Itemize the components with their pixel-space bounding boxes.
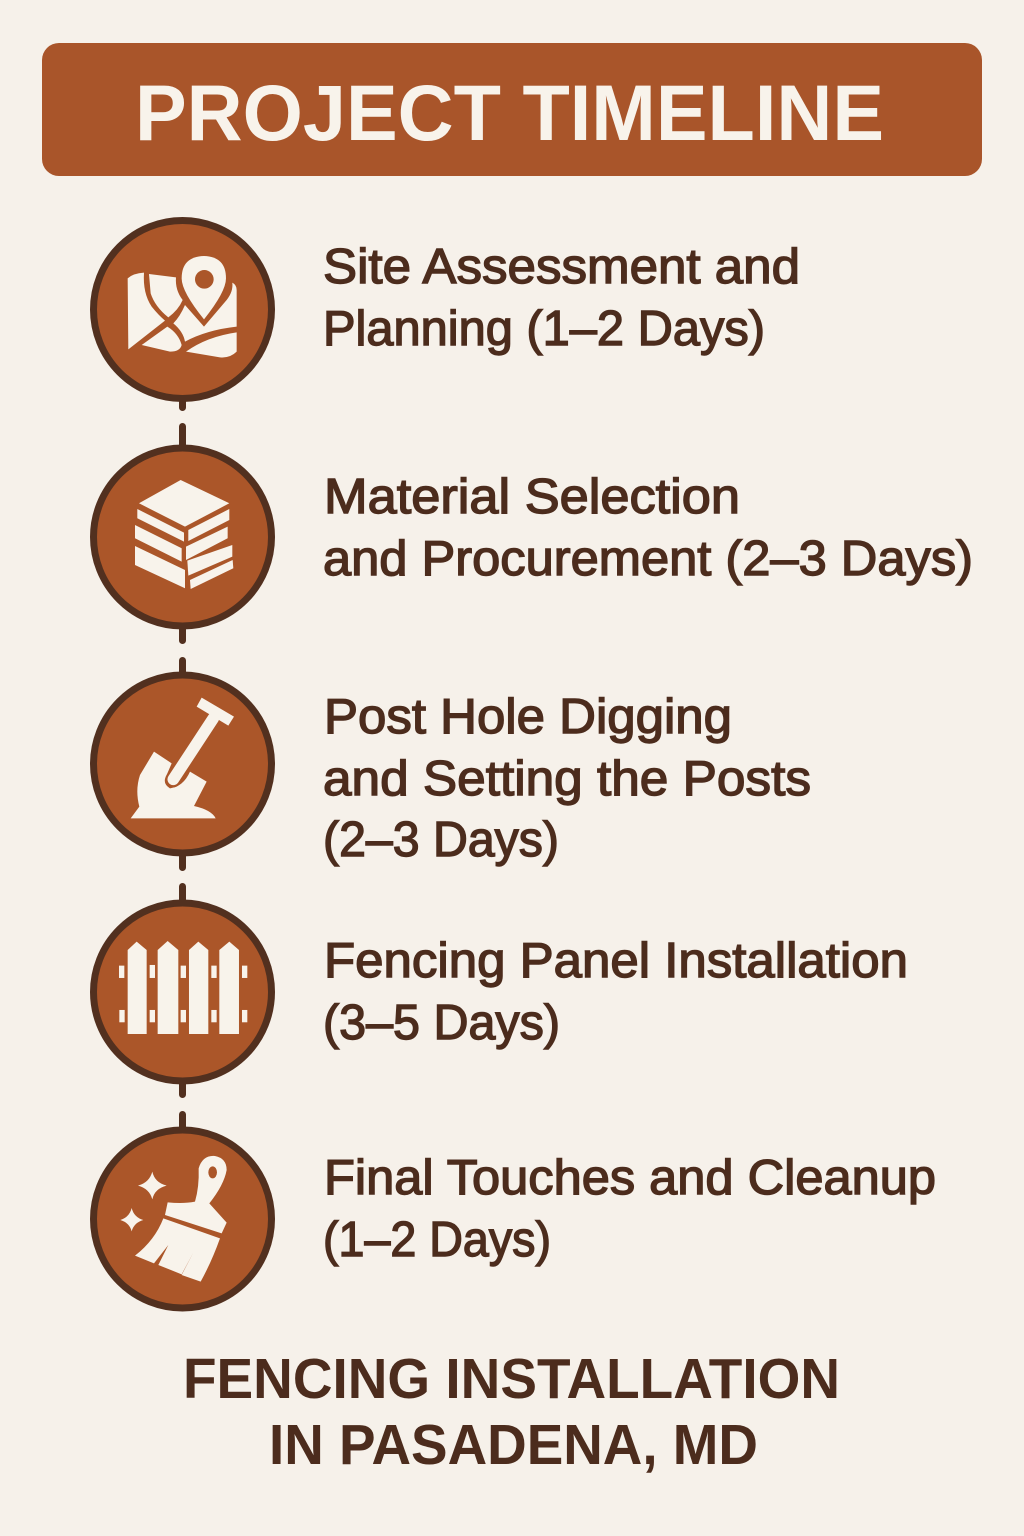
step 1 label xyxy=(323,240,800,356)
step 3 label: Post Hole Digging xyxy=(324,690,732,744)
dashed connector: step 2 to 3 xyxy=(179,627,186,673)
step 4 badge: fence icon xyxy=(94,903,272,1081)
dashed connector: step 3 to 4 xyxy=(179,855,186,901)
footer heading xyxy=(183,1347,840,1477)
step 2 badge: materials icon xyxy=(94,448,272,626)
step 3 badge: shovel icon xyxy=(94,675,272,853)
footer heading: IN PASADENA, MD xyxy=(269,1413,758,1477)
icon: map with pin xyxy=(128,256,237,357)
step 5 label xyxy=(323,1151,936,1267)
title banner xyxy=(42,43,982,176)
step 3 label: (2–3 Days) xyxy=(323,813,559,867)
step 5 badge: brush icon xyxy=(94,1130,272,1308)
title: PROJECT TIMELINE xyxy=(135,68,884,157)
step 4 label xyxy=(323,934,908,1050)
step 4 label: Fencing Panel Installation xyxy=(324,934,908,988)
icon: picket fence xyxy=(119,941,247,1034)
step 3 label: and Setting the Posts xyxy=(323,752,811,806)
step 5 label: Final Touches and Cleanup xyxy=(324,1151,936,1205)
icon: brush and sparkles xyxy=(120,1156,227,1282)
step 2 label: Material Selection xyxy=(324,470,740,524)
step 5 label: (1–2 Days) xyxy=(323,1213,551,1267)
step 3 label xyxy=(323,690,811,867)
step 1 badge: map icon xyxy=(94,220,272,398)
step 2 label: and Procurement (2–3 Days) xyxy=(323,532,973,586)
step 1 label: Planning (1–2 Days) xyxy=(323,302,765,356)
step 1 label: Site Assessment and xyxy=(323,240,800,294)
step 2 label xyxy=(323,470,973,586)
footer heading: FENCING INSTALLATION xyxy=(183,1347,840,1411)
dashed connector: step 4 to 5 xyxy=(179,1082,186,1129)
icon: shovel in ground xyxy=(131,698,234,818)
dashed connector: step 1 to 2 xyxy=(179,400,186,446)
step 4 label: (3–5 Days) xyxy=(323,996,560,1050)
icon: stacked boards xyxy=(135,480,233,589)
